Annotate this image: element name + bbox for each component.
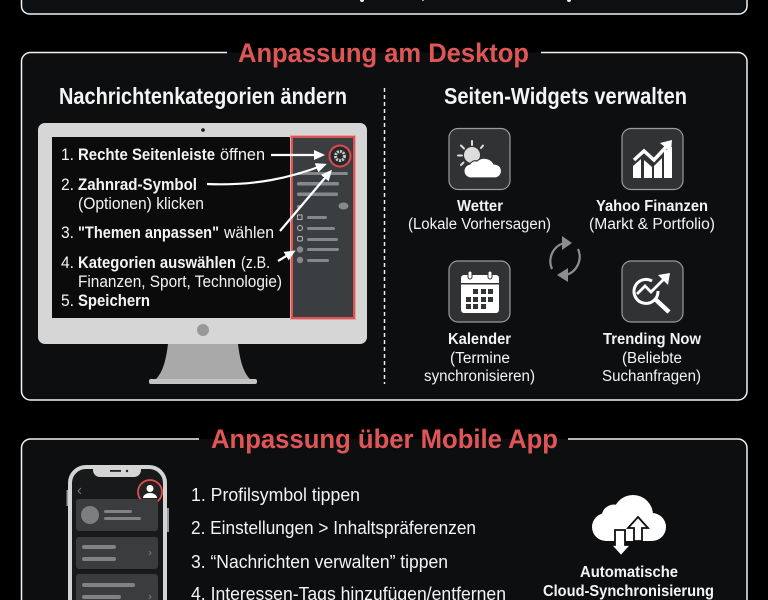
label: Yahoo Finanzen: Yahoo Finanzen xyxy=(596,198,708,215)
steps text: 3. xyxy=(61,224,74,242)
panel: Anpassung über Mobile App xyxy=(22,424,747,600)
icon: bar chart with arrow xyxy=(633,140,672,178)
label: cloud sync: Automatische xyxy=(580,564,678,581)
widget: Kalender: (Termine xyxy=(450,350,510,367)
panel: top section remnant xyxy=(22,0,747,14)
widget: Kalender xyxy=(424,261,535,385)
steps text: Finanzen, Sport, Technologie) xyxy=(78,273,282,291)
monitor illustration xyxy=(38,123,367,384)
icon: calendar xyxy=(461,271,499,313)
steps text: Zahnrad-Symbol xyxy=(78,176,197,194)
label: cloud sync xyxy=(543,564,714,600)
steps text: 1. xyxy=(61,146,74,164)
steps text: Rechte Seitenleiste xyxy=(78,146,215,164)
mobile steps list: 3. “Nachrichten verwalten” tippen xyxy=(191,551,448,572)
phone illustration xyxy=(66,466,169,600)
steps text: (z.B. xyxy=(241,254,270,272)
steps text: Kategorien auswählen xyxy=(78,254,236,272)
widget: Yahoo Finanzen xyxy=(589,128,715,233)
sidebar mockup xyxy=(291,136,355,319)
steps text xyxy=(61,146,282,310)
steps text: wählen xyxy=(223,224,274,242)
widget: Trending Now: (Beliebte xyxy=(622,350,682,367)
steps text: "Themen anpassen" xyxy=(78,224,219,242)
mobile steps list: 1. Profilsymbol tippen xyxy=(191,484,360,505)
widget: Trending Now xyxy=(602,261,702,385)
widget: Wetter xyxy=(408,128,551,233)
steps text: 5. xyxy=(61,292,74,310)
heading: Nachrichtenkategorien ändern: Nachrichtenkategorien ändern xyxy=(59,83,347,109)
panel: Anpassung am Desktop xyxy=(22,38,747,400)
icon: sync arrows xyxy=(550,236,580,282)
widget: Kalender: synchronisieren) xyxy=(424,368,535,385)
heading: Anpassung am Desktop: Anpassung am Desktop xyxy=(238,38,529,68)
heading: Anpassung über Mobile App: Anpassung über Mobile App xyxy=(211,424,558,454)
arrows to sidebar xyxy=(207,155,330,261)
mobile steps list: 2. Einstellungen > Inhaltspräferenzen xyxy=(191,517,476,538)
label: Wetter: Wetter xyxy=(457,198,503,215)
label: Kalender: Kalender xyxy=(448,331,511,348)
icon: sun and cloud xyxy=(458,141,502,178)
steps text: (Optionen) klicken xyxy=(78,195,204,213)
widget: Yahoo Finanzen: (Markt & Portfolio) xyxy=(589,216,715,233)
label: Trending Now: Trending Now xyxy=(603,331,702,348)
label: cloud sync: Cloud-Synchronisierung xyxy=(543,583,714,600)
widget: Wetter: (Lokale Vorhersagen) xyxy=(408,216,551,233)
heading: Seiten-Widgets verwalten: Seiten-Widgets verwalten xyxy=(444,83,687,109)
steps text: 2. xyxy=(61,176,74,194)
steps text: 4. xyxy=(61,254,74,272)
steps text: Speichern xyxy=(78,292,150,310)
icon: cloud sync xyxy=(592,495,666,556)
mobile steps list xyxy=(191,484,506,600)
profile icon highlight xyxy=(138,480,162,504)
steps text: öffnen xyxy=(220,146,265,164)
icon: magnifier with trend xyxy=(634,273,670,312)
widget: Trending Now: Suchanfragen) xyxy=(602,368,701,385)
